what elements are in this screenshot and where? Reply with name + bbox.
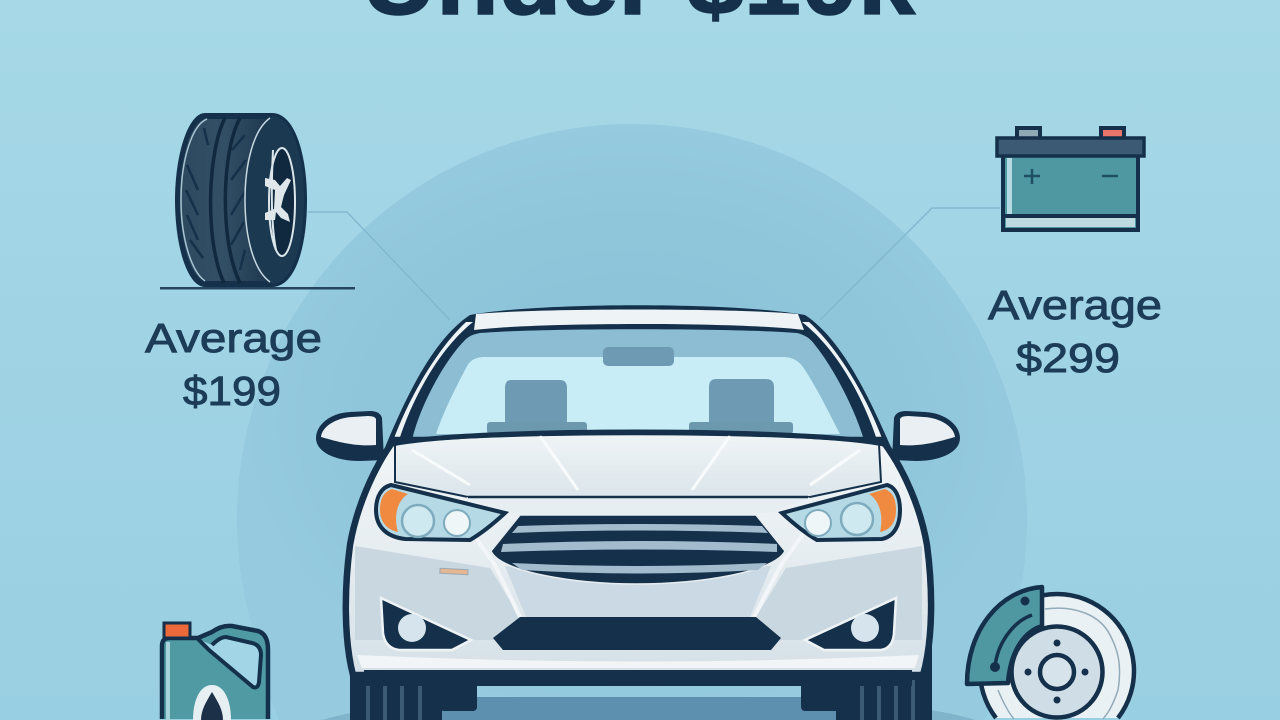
label: tire price: Average bbox=[145, 315, 322, 361]
icon: brake disc bbox=[967, 587, 1134, 719]
icon: battery bbox=[997, 128, 1144, 230]
cabin and roof bbox=[380, 305, 897, 460]
tire side wall and rim bbox=[245, 116, 304, 284]
side marker bbox=[440, 568, 468, 575]
label: battery price: Average bbox=[988, 282, 1162, 328]
left fog light bbox=[381, 598, 471, 650]
label: tire price bbox=[145, 315, 322, 414]
grille bbox=[491, 515, 785, 584]
right headlight bbox=[782, 485, 900, 540]
lower intake bbox=[493, 617, 781, 650]
label: battery price: $299 bbox=[1016, 335, 1120, 381]
car front view bbox=[316, 305, 960, 720]
left headlight bbox=[376, 485, 505, 540]
road shadow bbox=[322, 697, 975, 720]
icon: oil jug bbox=[162, 623, 268, 720]
lower bumper shading bbox=[355, 530, 922, 668]
leader line: tire bbox=[308, 212, 450, 320]
tires bbox=[350, 640, 932, 720]
rear-view mirror bbox=[603, 347, 674, 366]
seats bbox=[487, 379, 793, 434]
car body bbox=[346, 440, 931, 675]
label: tire price: $199 bbox=[183, 368, 281, 414]
right fog light bbox=[805, 598, 896, 650]
background halo circle bbox=[237, 124, 1027, 720]
bottom bar bbox=[364, 670, 912, 686]
label: battery price bbox=[988, 282, 1162, 381]
mirrors bbox=[316, 411, 960, 461]
icon: tire bbox=[160, 113, 355, 290]
leader line: battery bbox=[820, 208, 1000, 320]
hood bbox=[392, 432, 884, 513]
